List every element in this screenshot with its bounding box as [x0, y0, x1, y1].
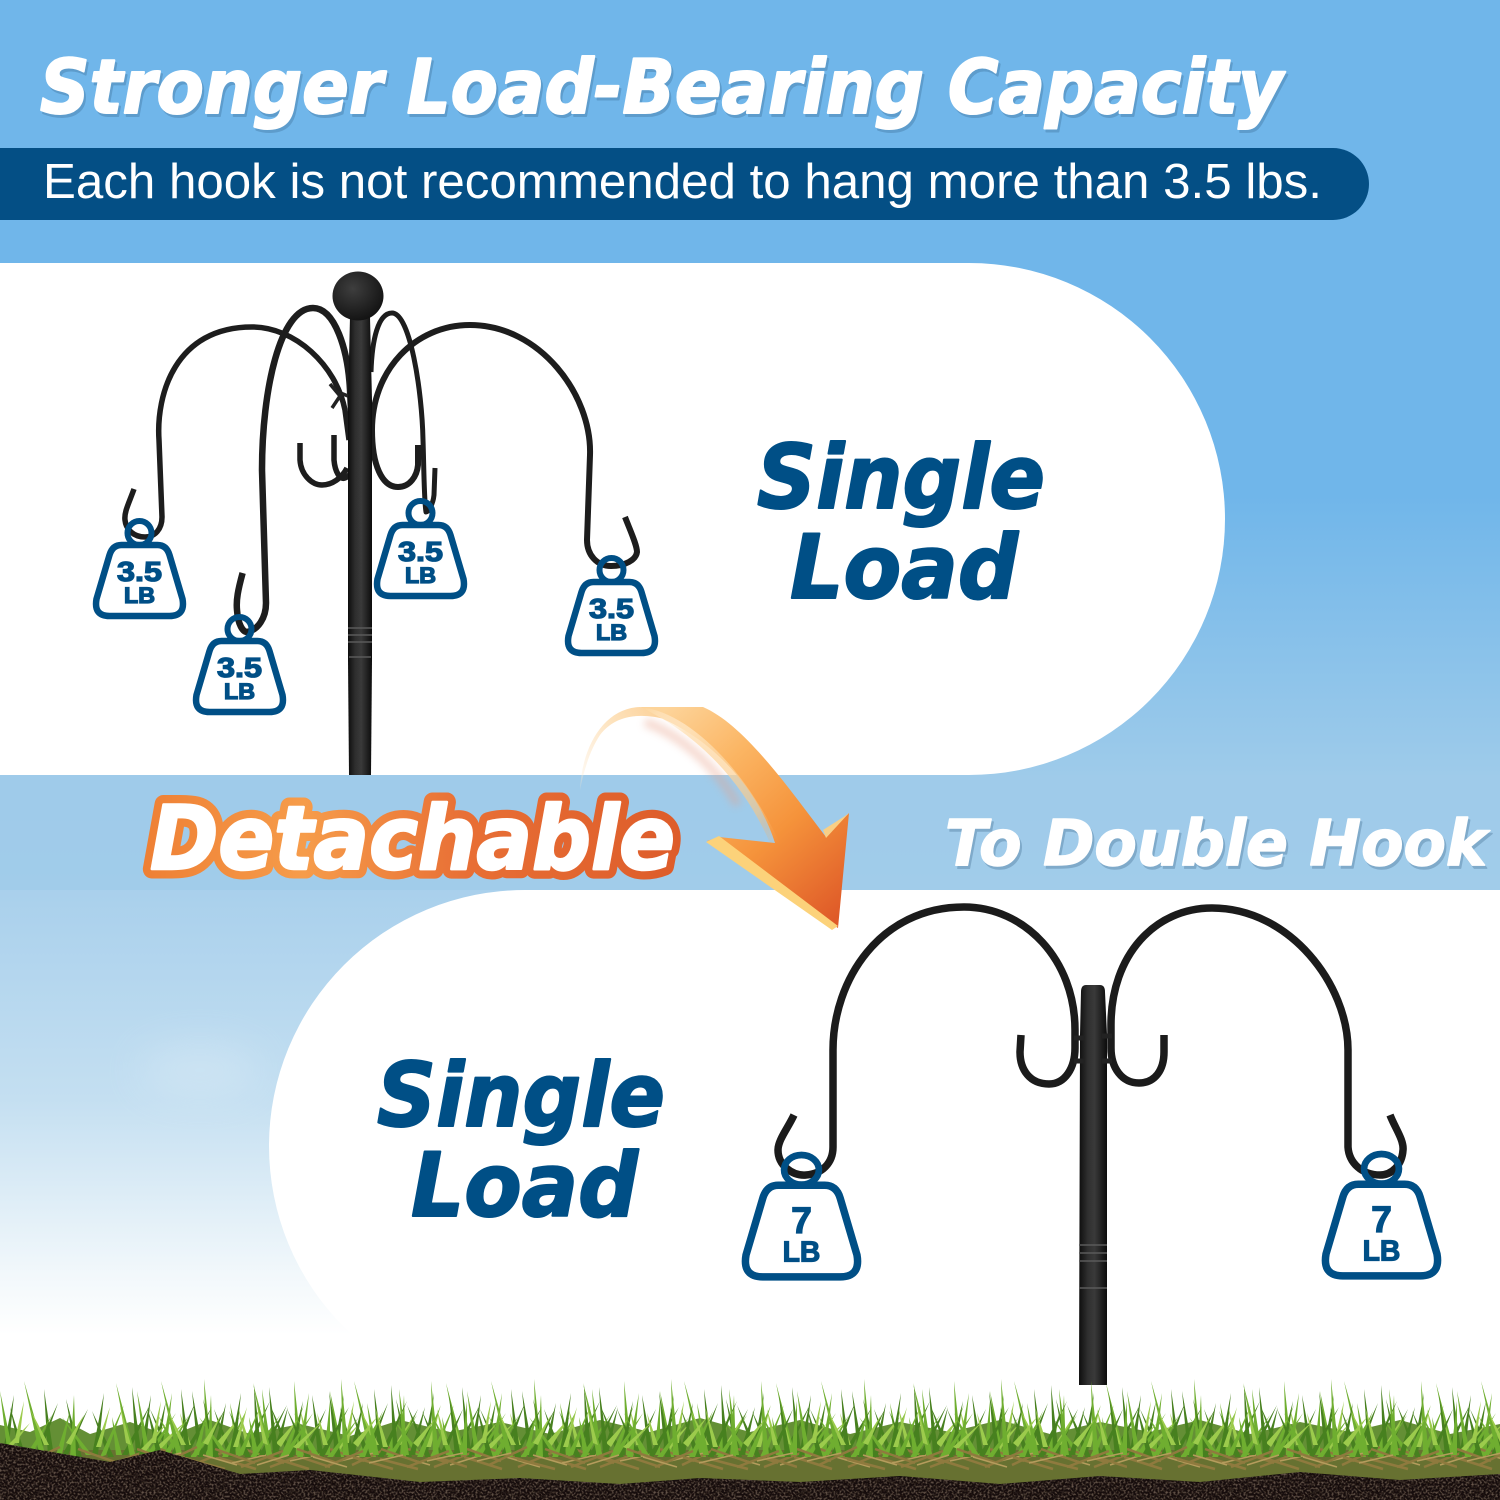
heading: single load — [757, 426, 1045, 619]
weight 3.5 lb right: 3.5 — [589, 593, 634, 624]
weight 3.5 lb front — [196, 617, 283, 712]
weight 3.5 lb left: LB — [124, 583, 155, 608]
banner: recommendation — [0, 148, 1369, 220]
label: to double hook: To Double Hook — [945, 807, 1491, 880]
arrow: detach to double hook — [580, 707, 849, 930]
weight 3.5 lb left: 3.5 — [117, 556, 162, 587]
pole bracket bolts — [1074, 1036, 1112, 1061]
weight 7 lb left — [745, 1155, 858, 1277]
weight 3.5 lb left — [96, 521, 183, 616]
weight 3.5 lb front: LB — [224, 679, 255, 704]
pole finial ball — [332, 272, 384, 320]
arrow head highlight — [706, 836, 838, 930]
heading: single load — [377, 1044, 665, 1237]
weight 3.5 lb right — [568, 558, 655, 653]
detachable label: Detachable — [150, 787, 675, 890]
label: to double hook: To Double Hook — [947, 810, 1493, 883]
grass and soil — [0, 1365, 1500, 1500]
four hook shepherd pole — [125, 272, 637, 775]
banner text: Each hook is not recommended to hang more than 3.5 lbs. — [43, 155, 1322, 209]
heading: single load: Single — [757, 426, 1045, 529]
weight 7 lb right: 7 — [1371, 1198, 1392, 1240]
panel: single load double hook — [269, 890, 1500, 1402]
heading: single load: Load — [411, 1134, 639, 1237]
weight 3.5 lb center — [377, 501, 464, 596]
title: Stronger Load-Bearing Capacity — [40, 43, 1286, 131]
double hook shepherd pole — [778, 907, 1403, 1385]
weight 3.5 lb center: 3.5 — [398, 536, 443, 567]
heading: single load: Single — [377, 1044, 665, 1147]
weight 3.5 lb front: 3.5 — [217, 652, 262, 683]
heading: single load: Load — [790, 516, 1019, 619]
weight 3.5 lb right: LB — [596, 620, 627, 645]
pole shaft — [348, 317, 372, 775]
weight 7 lb right: LB — [1363, 1235, 1400, 1267]
weight 3.5 lb center: LB — [405, 563, 436, 588]
title: Stronger Load-Bearing Capacity — [42, 46, 1288, 134]
arrow inner ridge highlight — [640, 707, 780, 843]
pole shaft — [1079, 985, 1107, 1385]
panel: single load four hook — [0, 263, 1225, 775]
weight 7 lb left: 7 — [791, 1199, 812, 1241]
detachable label: Detachable — [150, 787, 675, 890]
wing screw — [330, 384, 348, 408]
weight 7 lb left: LB — [783, 1236, 820, 1268]
weight 7 lb right — [1325, 1154, 1438, 1276]
